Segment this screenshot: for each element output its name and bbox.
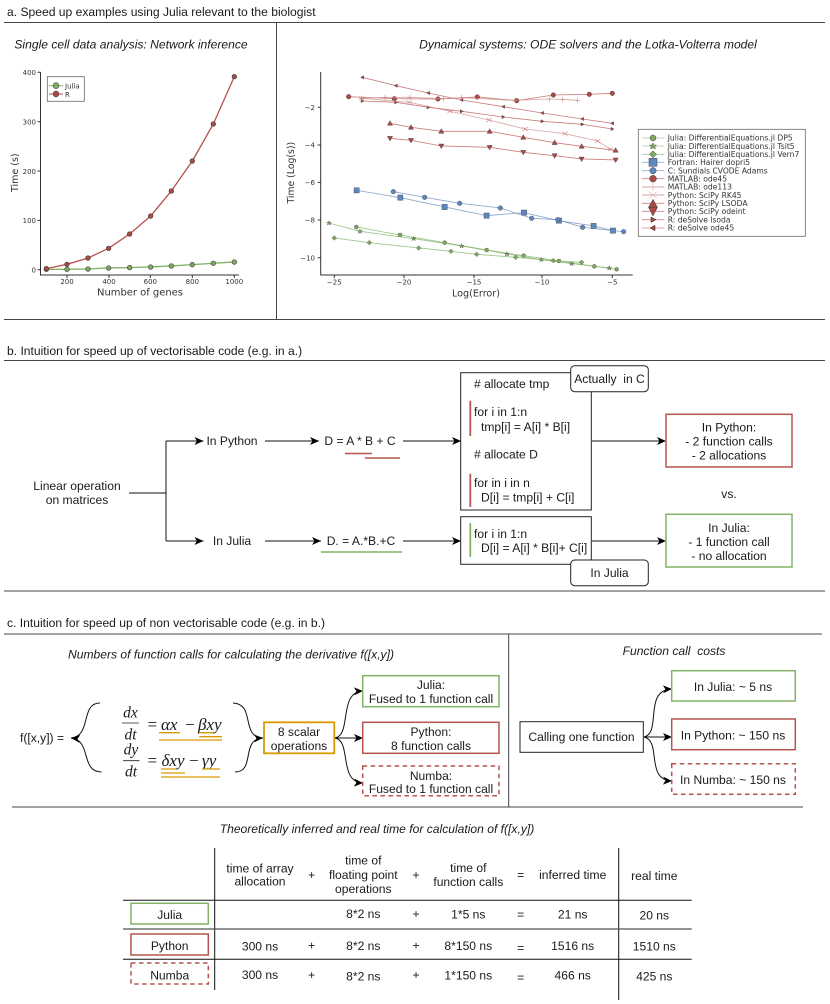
line chart: time versus number of genes: 100: [23, 217, 36, 225]
line chart: time versus number of genes: Number of genes: [97, 288, 183, 298]
scatter line chart: time versus error: −10: [300, 254, 315, 262]
row: Julia: =: [517, 908, 524, 922]
scatter line chart: time versus error: −25: [327, 278, 342, 286]
timing table: [123, 848, 692, 1000]
solver legend: Python: SciPy LSODA: [668, 199, 748, 208]
python result box: 8 function calls: [391, 739, 471, 753]
equations: αx: [161, 715, 178, 734]
scatter line chart: time versus error: Log(Error): [452, 288, 500, 300]
line chart: time versus number of genes: 1000: [225, 278, 243, 286]
row: Julia: 21 ns: [558, 908, 587, 922]
julia cost box: In Julia: ~ 5 ns: [694, 680, 772, 694]
solver legend: Python: SciPy RK45: [668, 191, 742, 200]
julia result box: - 1 function call: [688, 535, 770, 549]
table header: operations: [335, 882, 392, 896]
calling one function box: [520, 722, 643, 752]
table header: function calls: [433, 875, 503, 889]
python code box: D[i] = tmp[i] + C[i]: [481, 491, 574, 505]
line chart: time versus number of genes: 400: [23, 69, 36, 77]
row: Numba: [131, 963, 672, 985]
numba cost box: [672, 764, 795, 794]
python code box: for in i in n: [474, 476, 530, 490]
scatter line chart: time versus error: −5: [607, 278, 617, 286]
equations: dx: [123, 704, 138, 722]
panel: number of function calls: [20, 648, 499, 796]
calling one function box: Calling one function: [528, 730, 635, 744]
scatter line chart: time versus error: [286, 72, 633, 300]
row: Numba: 466 ns: [555, 968, 591, 982]
equations: [122, 704, 222, 780]
table header: time of: [450, 861, 486, 875]
row: Numba: 8*2 ns: [346, 970, 380, 984]
line chart: time versus number of genes: 300: [23, 118, 36, 126]
solver legend: Julia: DifferentialEquations.jl DP5: [667, 134, 793, 143]
table header: floating point: [329, 868, 398, 882]
table header: [226, 854, 678, 896]
branching arrows: [644, 689, 672, 737]
callout: in Julia: In Julia: [590, 566, 629, 580]
numba cost box: In Numba: ~ 150 ns: [680, 773, 786, 787]
python cost box: In Python: ~ 150 ns: [681, 728, 785, 742]
callout: in Julia: [571, 560, 648, 586]
8 scalar operations box: [264, 722, 334, 753]
arrow python to expression: [265, 440, 319, 442]
table header: inferred time: [539, 868, 607, 882]
row: Python: +: [308, 939, 315, 953]
line chart: time versus number of genes: 400: [102, 278, 116, 286]
table header: =: [517, 868, 524, 882]
row: Python: +: [412, 939, 420, 953]
branching arrows: [335, 691, 363, 738]
row: Python: Python: [151, 939, 189, 953]
8 scalar operations box: 8 scalar: [278, 725, 320, 739]
scatter line chart: time versus error: −8: [305, 216, 315, 224]
python code box: # allocate tmp: [474, 377, 550, 391]
panel: dynamical systems ODE solvers: [286, 38, 805, 300]
chart legend: R: [65, 91, 70, 99]
solver legend: R: deSolve lsoda: [668, 216, 731, 224]
section b heading: b. Intuition for speed up of vectorisable code (e.g. in a.): [7, 344, 302, 358]
numba result box: [363, 766, 499, 796]
scatter line chart: time versus error: −4: [305, 142, 316, 150]
julia result box: In Julia:: [708, 521, 750, 535]
line chart: time versus number of genes: Time (s): [10, 153, 21, 193]
table header: real time: [631, 869, 678, 883]
arrow to python code: [403, 440, 461, 442]
row: Python: 8*2 ns: [346, 939, 380, 953]
function label: f([x,y]) =: [20, 731, 64, 745]
line chart: time versus number of genes: 600: [144, 278, 157, 286]
julia code box: D[i] = A[i] * B[i]+ C[i]: [481, 541, 587, 555]
section a heading: a. Speed up examples using Julia relevant to the biologist: [7, 5, 316, 19]
solver legend: Julia: DifferentialEquations.jl Tsit5: [667, 142, 795, 151]
julia expression: D. = A.*B.+C: [327, 534, 396, 548]
julia result box: [363, 676, 499, 707]
scatter line chart: time versus error: −15: [467, 278, 481, 286]
julia label: In Julia: [213, 534, 251, 548]
python expression underlines: [345, 454, 400, 458]
row: Python: =: [517, 941, 524, 955]
solver legend: MATLAB: ode45: [668, 174, 727, 184]
start label: Linear operation: [33, 479, 121, 493]
solver legend: Julia: DifferentialEquations.jl Vern7: [667, 150, 799, 159]
row: Python: 8*150 ns: [444, 939, 492, 953]
python code box: [461, 373, 591, 510]
python code box: tmp[i] = A[i] * B[i]: [481, 420, 570, 434]
equations: δxy: [162, 751, 185, 770]
equations: γy: [202, 751, 217, 770]
line chart: time versus number of genes: [10, 69, 243, 298]
line chart: time versus number of genes: 0: [32, 266, 36, 274]
row: Numba: Numba: [150, 968, 189, 982]
callout: actually in C: Actually in C: [574, 372, 645, 386]
python result box: Python:: [410, 725, 452, 739]
python cost box: [672, 719, 795, 750]
row: Numba: 300 ns: [242, 968, 278, 982]
row: Julia: 1*5 ns: [451, 908, 485, 922]
julia result box: Fused to 1 function call: [369, 692, 493, 706]
row: Julia: 20 ns: [640, 909, 669, 923]
julia result box: - no allocation: [691, 549, 767, 563]
solver legend: C: Sundials CVODE Adams: [668, 166, 768, 176]
panel a right heading: Dynamical systems: ODE solvers and the Lotka-Volterra model: [419, 38, 757, 52]
julia result box: Julia:: [417, 678, 445, 692]
arrow to julia code: [403, 540, 461, 542]
equations: βxy: [197, 715, 222, 734]
row: Julia: 8*2 ns: [346, 907, 380, 921]
row: Numba: +: [412, 968, 420, 982]
equations: −: [184, 715, 195, 734]
julia result box: [666, 514, 792, 567]
python result box: - 2 function calls: [685, 434, 773, 448]
scatter line chart: time versus error: −2: [305, 104, 315, 112]
equations: =: [146, 715, 158, 734]
panel heading: Function call costs: [623, 644, 725, 658]
julia code box: [461, 517, 591, 564]
equations: dt: [125, 764, 138, 780]
python result box: In Python:: [702, 420, 756, 434]
table header: +: [412, 868, 420, 882]
solver legend: [638, 129, 805, 236]
table header: time of: [345, 854, 381, 868]
8 scalar operations box: operations: [271, 739, 327, 753]
panel: single cell network inference: [10, 38, 248, 298]
panel c left heading: Numbers of function calls for calculating the derivative f([x,y]): [68, 648, 394, 662]
row: Python: 300 ns: [242, 940, 278, 954]
row: Julia: [131, 903, 669, 924]
row: Numba: +: [308, 968, 315, 982]
julia cost box: [672, 671, 795, 701]
chart legend: [47, 77, 84, 101]
row: Python: 1516 ns: [551, 939, 594, 953]
row: Julia: Julia: [157, 908, 182, 922]
python label: In Python: [206, 434, 258, 448]
line chart: time versus number of genes: 800: [186, 278, 199, 286]
versus label: vs.: [721, 487, 737, 501]
table header: +: [308, 868, 315, 882]
equations: dy: [124, 742, 138, 758]
python result box: [363, 722, 499, 753]
julia expression underline: [321, 551, 402, 553]
left brace: [71, 703, 102, 772]
table header: time of array: [226, 861, 294, 875]
equations: =: [146, 751, 158, 770]
line chart: time versus number of genes: 200: [60, 278, 74, 286]
row: Numba: =: [517, 971, 524, 985]
row: Python: [131, 934, 676, 955]
chart legend: Julia: [64, 82, 80, 90]
python code box: for i in 1:n: [474, 405, 527, 419]
callout: actually in C: [571, 366, 648, 392]
section c heading: c. Intuition for speed up of non vectorisable code (e.g. in b.): [7, 616, 325, 630]
python code box: # allocate D: [474, 448, 538, 462]
arrow to julia result: [592, 540, 666, 542]
scatter line chart: time versus error: Time (Log(s)): [286, 142, 297, 205]
scatter line chart: time versus error: −20: [397, 278, 411, 286]
start label: on matrices: [46, 493, 108, 507]
solver legend: R: deSolve ode45: [668, 224, 734, 233]
panel a left heading: Single cell data analysis: Network inference: [14, 38, 248, 52]
numba result box: Numba:: [410, 769, 452, 783]
numba result box: Fused to 1 function call: [369, 782, 493, 796]
row: Numba: 1*150 ns: [444, 969, 492, 983]
right brace: [233, 703, 263, 772]
scatter line chart: time versus error: −10: [535, 278, 549, 286]
python result box: [666, 414, 792, 467]
julia code box: for i in 1:n: [474, 527, 527, 541]
solver legend: Fortran: Hairer dopri5: [668, 158, 750, 167]
equations: dt: [124, 726, 137, 744]
table header: allocation: [234, 875, 286, 889]
scatter line chart: time versus error: −6: [305, 179, 316, 187]
solver legend: Python: SciPy odeint: [668, 207, 746, 216]
line chart: time versus number of genes: 200: [23, 168, 36, 176]
arrow to python result: [592, 440, 666, 442]
equations: −: [188, 751, 199, 770]
solver legend: MATLAB: ode113: [668, 183, 732, 192]
python expression: D = A * B + C: [324, 434, 396, 448]
panel: function call costs: [520, 644, 795, 794]
row: Julia: +: [412, 907, 420, 921]
arrow julia to expression: [265, 540, 321, 542]
row: Python: 1510 ns: [633, 940, 676, 954]
flow diagram: vectorisable code: [33, 366, 792, 586]
python result box: - 2 allocations: [692, 448, 766, 462]
table heading: Theoretically inferred and real time for calculation of f([x,y]): [220, 822, 534, 836]
branch arrows: [129, 441, 204, 541]
row: Numba: 425 ns: [636, 970, 672, 984]
